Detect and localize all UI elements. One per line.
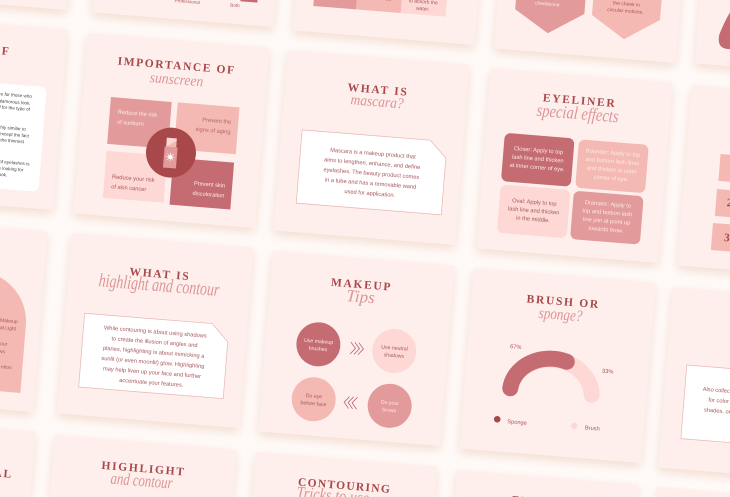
circle: do your brows: Do your xyxy=(381,400,399,407)
panel: partial card with text box: for color xyxy=(708,398,729,405)
panel: top-right partial card xyxy=(695,0,730,78)
panel: top partial card with labels: Both xyxy=(230,2,240,8)
circle: use neutral shadows: Use neutral xyxy=(381,345,408,353)
block: prevent aging: Prevent the xyxy=(202,117,232,126)
block: prevent aging xyxy=(174,102,240,154)
circle: do eye before face: before face xyxy=(300,400,327,408)
text box: mascara definition: aims to lengthen, enhance, and define xyxy=(324,157,420,171)
circle: do your brows xyxy=(366,382,413,430)
legend: brush: Brush xyxy=(585,425,600,433)
block: prevent discoloration: discoloration xyxy=(192,191,225,199)
panel: contouring tricks: CONTOURING xyxy=(298,476,392,496)
circle: use makeup brushes: brushes xyxy=(309,346,328,353)
panel: eyeliner special effects xyxy=(476,68,672,263)
block: oval: lash line and thicken xyxy=(508,206,560,216)
panel: top partial card with pentagons: cheekbone. xyxy=(535,1,561,9)
panel: partial card with arch: Makeup xyxy=(0,318,18,325)
panel: partial card with text box: shades, or xyxy=(704,407,730,416)
block: prevent discoloration xyxy=(170,158,234,209)
panel: partial card with arch: al Light xyxy=(0,325,17,332)
panel: brush or sponge: 33% xyxy=(602,369,614,376)
block: closer: lash line and thicken xyxy=(512,154,564,165)
panel: eyeliner special effects: special effects xyxy=(536,99,619,127)
block: rounder: Rounder: Apply to top xyxy=(586,148,641,159)
block: rounder xyxy=(575,139,649,193)
panel: highlight and contour xyxy=(50,435,236,497)
text box: highlight and contour definition: may help liven up your face and further xyxy=(103,366,201,380)
block: dramatic: line join at point up xyxy=(583,217,630,227)
block: rounder: and thicken at outer xyxy=(587,166,637,176)
panel: importance of sunscreen: sunscreen xyxy=(149,70,204,91)
text box: mascara definition: Mascara is a makeup product that xyxy=(330,148,416,161)
panel: top partial card with labels xyxy=(92,0,288,27)
block: closer xyxy=(501,133,575,187)
panel: brush or sponge xyxy=(459,268,655,463)
block: oval: in the middle. xyxy=(516,216,550,224)
circle: use makeup brushes xyxy=(295,321,342,368)
panel: highlight and contour: and contour xyxy=(110,470,173,493)
block: dramatic: towards brow. xyxy=(588,226,624,235)
panel: what is mascara xyxy=(273,50,469,245)
legend: sponge: Sponge xyxy=(507,419,527,427)
panel: top partial card with pentagons: the cheek in xyxy=(613,0,640,9)
block: reduce sunburn xyxy=(107,97,172,149)
legend: brush xyxy=(571,422,600,433)
panel: what is mascara: mascara? xyxy=(350,92,404,113)
panel: makeup tips xyxy=(258,251,454,446)
icon: sunscreen bottle in circle xyxy=(144,126,198,180)
panel: top partial card with three blocks: water. xyxy=(416,6,429,13)
block: reduce skin cancer: of skin cancer xyxy=(111,184,147,193)
legend: sponge xyxy=(494,416,527,427)
panel: highlight and contour: HIGHLIGHT xyxy=(101,460,186,479)
panel: brush or sponge: sponge? xyxy=(538,305,584,326)
block: dramatic xyxy=(570,191,644,245)
panel: partial card types of xyxy=(0,15,67,210)
block: closer: Closer: Apply to top xyxy=(514,146,563,156)
block: rounder: corner of eye. xyxy=(593,175,629,183)
block: prevent aging: signs of aging xyxy=(195,127,231,136)
block: reduce skin cancer: Reduce your risk xyxy=(112,174,155,184)
panel: partial card with text box xyxy=(658,287,730,482)
block: dramatic: Dramatic: Apply to xyxy=(585,200,631,210)
text box: highlight and contour definition: planes, highlighting is about mimicking a xyxy=(103,346,205,360)
panel: top partial card with pentagons: circular motions. xyxy=(607,7,644,16)
panel: contouring tricks xyxy=(252,452,437,497)
circle: do your brows: brows xyxy=(382,407,397,414)
block: closer: at inner corner of eye. xyxy=(509,163,565,173)
text box: mascara definition: eyelashes. The beauty product comes xyxy=(323,167,420,181)
text box: mascara definition xyxy=(296,130,447,215)
panel: partial card with arch xyxy=(0,217,47,412)
panel: partial card with numbered squares xyxy=(677,85,730,280)
circle: use makeup brushes: Use makeup xyxy=(304,338,333,346)
circle: do eye before face xyxy=(290,376,337,423)
panel: brush or sponge: BRUSH OR xyxy=(526,293,600,311)
text box: highlight and contour definition: While contouring is about using shadows xyxy=(104,325,207,340)
panel: top partial card with pentagons xyxy=(494,0,690,63)
block: oval xyxy=(497,184,570,238)
chart: semi-donut brush vs sponge xyxy=(510,356,594,395)
block: reduce sunburn: Reduce the risk xyxy=(117,110,157,119)
panel: what is highlight and contour xyxy=(57,233,253,428)
block: prevent discoloration: Prevent skin xyxy=(194,181,225,189)
panel: partial bottom card xyxy=(454,470,638,497)
arrow: right chevrons xyxy=(350,342,364,355)
block: reduce sunburn: of sunburn xyxy=(117,120,144,128)
panel: makeup tips: Tips xyxy=(346,286,376,307)
panel: eyeliner special effects: EYELINER xyxy=(542,92,617,110)
panel: brush or sponge: 67% xyxy=(510,344,522,351)
block: dramatic: top and bottom lash xyxy=(582,208,632,218)
text box: highlight and contour definition: to create the illusion of angles and xyxy=(111,336,198,349)
panel: importance of sunscreen: IMPORTANCE OF xyxy=(117,55,236,77)
panel: importance of sunscreen xyxy=(73,33,269,228)
panel: partial bottom-left card xyxy=(0,417,35,497)
block: oval: Oval: Apply to top xyxy=(512,198,557,208)
text box: highlight and contour definition: sunlit (or even moonlit) glow. Highlighting xyxy=(101,356,205,370)
block: reduce skin cancer xyxy=(103,151,167,203)
circle: use neutral shadows: shadows xyxy=(383,352,405,360)
panel: what is highlight and contour: WHAT IS xyxy=(129,266,191,283)
panel: top-left partial card xyxy=(0,0,81,10)
text box: highlight and contour definition xyxy=(79,313,229,399)
panel: what is highlight and contour: highlight and contour xyxy=(98,269,221,301)
panel: makeup tips: MAKEUP xyxy=(331,277,393,294)
text box: mascara definition: in a tube and has a removable wand xyxy=(325,177,416,191)
panel: partial card with arch: ntion xyxy=(1,364,12,371)
block: rounder: and bottom lash lines xyxy=(585,157,640,167)
circle: do eye before face: Do eye xyxy=(306,393,322,400)
arrow: left chevrons xyxy=(344,396,358,409)
text box: mascara definition: used for application. xyxy=(344,189,396,199)
panel: partial bottom-right card xyxy=(656,487,730,497)
panel: partial card with numbered squares: 3 xyxy=(723,232,730,245)
panel: what is mascara: WHAT IS xyxy=(347,82,409,99)
circle: use neutral shadows xyxy=(371,327,418,375)
panel: top partial card with three blocks xyxy=(293,0,489,45)
text box: highlight and contour definition: accentuate your features. xyxy=(119,378,184,389)
